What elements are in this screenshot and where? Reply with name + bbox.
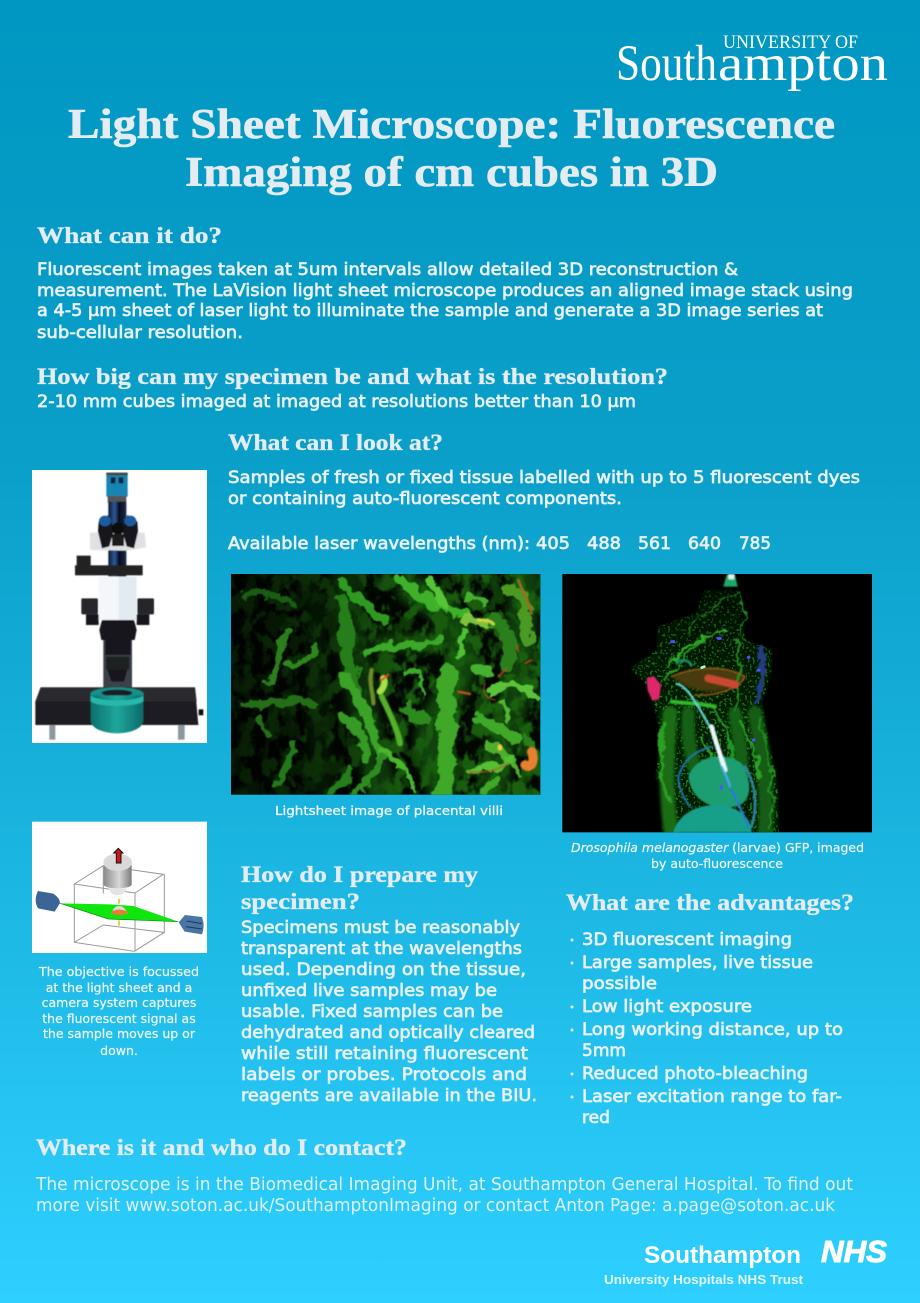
- list: advantages: red: [582, 1108, 610, 1128]
- text block: prepare specimen: dehydrated and optically cleared: [241, 1023, 535, 1043]
- text block: prepare specimen: while still retaining fluorescent: [241, 1044, 528, 1064]
- logo: Southampton University Hospitals NHS Trust: [604, 1234, 887, 1287]
- text block: laser wavelengths: [228, 534, 771, 554]
- text block: contact: more visit www.soton.ac.uk/SouthamptonImaging or contact Anton Page: a.page@soton.ac.uk: [36, 1196, 836, 1216]
- text block: prepare specimen: [241, 918, 537, 1106]
- list: advantages: Large samples, live tissue: [582, 953, 813, 973]
- heading: what can I look at: What can I look at?: [228, 430, 443, 455]
- caption: Drosophila: by auto-fluorescence: [651, 856, 783, 871]
- text block: contact: [35, 1175, 853, 1216]
- caption: placental villi: Lightsheet image of placental villi: [275, 803, 503, 818]
- heading: specimen size: How big can my specimen be and what is the resolution?: [37, 364, 668, 389]
- text block: samples: [228, 468, 860, 509]
- text block: laser wavelengths: 405: [536, 534, 570, 554]
- logo: University of Southampton: [616, 33, 888, 92]
- caption: objective: camera system captures: [42, 995, 196, 1010]
- title: [68, 102, 835, 196]
- caption: objective: the fluorescent signal as: [42, 1011, 196, 1026]
- logo: University of Southampton: ampton: [718, 36, 888, 92]
- caption: objective: The objective is focussed: [38, 964, 199, 979]
- text block: contact: The microscope is in the Biomedical Imaging Unit, at Southampton General Hospital. To find out: [35, 1175, 853, 1195]
- heading: prepare specimen: [241, 862, 479, 914]
- text block: prepare specimen: labels or probes. Protocols and: [241, 1065, 527, 1085]
- caption: objective: the sample moves up or: [43, 1026, 196, 1041]
- list: advantages: [570, 930, 843, 1128]
- text block: prepare specimen: used. Depending on the tissue,: [241, 960, 526, 980]
- heading: prepare specimen: How do I prepare my: [241, 862, 479, 887]
- text block: laser wavelengths: 785: [739, 534, 771, 554]
- list: advantages: Reduced photo-bleaching: [582, 1064, 808, 1084]
- title: Imaging of cm cubes in 3D: [185, 150, 718, 196]
- section: how do I prepare my specimen: [241, 862, 537, 1106]
- section: advantages: [566, 890, 854, 1128]
- section: specimen size: [37, 364, 668, 412]
- text block: laser wavelengths: Available laser wavelengths (nm):: [228, 534, 530, 554]
- text block: laser wavelengths: 640: [688, 534, 721, 554]
- list: advantages: Long working distance, up to: [582, 1020, 843, 1040]
- text block: prepare specimen: Specimens must be reasonably: [241, 918, 520, 938]
- photo: placental villi lightsheet image: [231, 574, 540, 795]
- caption: objective: down.: [100, 1043, 138, 1058]
- text block: laser wavelengths: 488: [587, 534, 621, 554]
- text block: what can it do: a 4-5 µm sheet of laser light to illuminate the sample and generate a 3D image series at: [37, 301, 823, 321]
- heading: contact: Where is it and who do I contact?: [36, 1135, 407, 1160]
- text block: prepare specimen: reagents are available in the BIU.: [241, 1086, 537, 1106]
- caption: Drosophila: Drosophila melanogaster (larvae) GFP, imaged: [571, 840, 864, 855]
- text block: what can it do: Fluorescent images taken at 5um intervals allow detailed 3D reconstruction &: [37, 260, 738, 280]
- section: what can it do: [37, 223, 853, 343]
- logo: Southampton University Hospitals NHS Trust: Southampton: [644, 1242, 801, 1269]
- section: contact: [35, 1135, 853, 1216]
- text block: what can it do: sub-cellular resolution.: [37, 323, 243, 343]
- list: advantages: 3D fluorescent imaging: [582, 930, 792, 950]
- text block: prepare specimen: transparent at the wavelengths: [241, 939, 522, 959]
- logo: University of Southampton: UNIVERSITY OF: [723, 33, 858, 53]
- text block: prepare specimen: unfixed live samples may be: [241, 981, 497, 1001]
- text block: prepare specimen: usable. Fixed samples can be: [241, 1002, 503, 1022]
- photo: light sheet microscope: [32, 470, 207, 743]
- list: advantages: 5mm: [582, 1041, 626, 1061]
- photo: Drosophila larvae auto-fluorescence: [562, 574, 872, 833]
- logo: Southampton University Hospitals NHS Trust: NHS: [821, 1234, 887, 1269]
- list: advantages: possible: [582, 974, 657, 994]
- text block: what can it do: measurement. The LaVision light sheet microscope produces an aligned image stack using: [37, 281, 853, 301]
- text block: samples: or containing auto-fluorescent components.: [228, 489, 622, 509]
- heading: advantages: What are the advantages?: [566, 890, 854, 915]
- text block: specimen size: 2-10 mm cubes imaged at imaged at resolutions better than 10 µm: [37, 392, 636, 412]
- logo: Southampton University Hospitals NHS Trust: University Hospitals NHS Trust: [604, 1273, 804, 1287]
- list: advantages: Low light exposure: [582, 997, 752, 1017]
- section: what can I look at: [228, 430, 860, 554]
- diagram: light sheet optical setup: [32, 822, 207, 953]
- caption: Drosophila: [571, 840, 864, 871]
- text block: what can it do: [37, 260, 853, 343]
- list: advantages: Laser excitation range to far-: [582, 1087, 842, 1107]
- text block: laser wavelengths: 561: [638, 534, 671, 554]
- logo: University of Southampton: South: [616, 36, 717, 92]
- caption: objective: at the light sheet and a: [46, 980, 192, 995]
- text block: samples: Samples of fresh or fixed tissue labelled with up to 5 fluorescent dyes: [228, 468, 860, 488]
- caption: objective: [38, 964, 199, 1058]
- heading: what can it do: What can it do?: [37, 223, 222, 248]
- heading: prepare specimen: specimen?: [241, 889, 360, 914]
- title: Light Sheet Microscope: Fluorescence: [68, 102, 835, 148]
